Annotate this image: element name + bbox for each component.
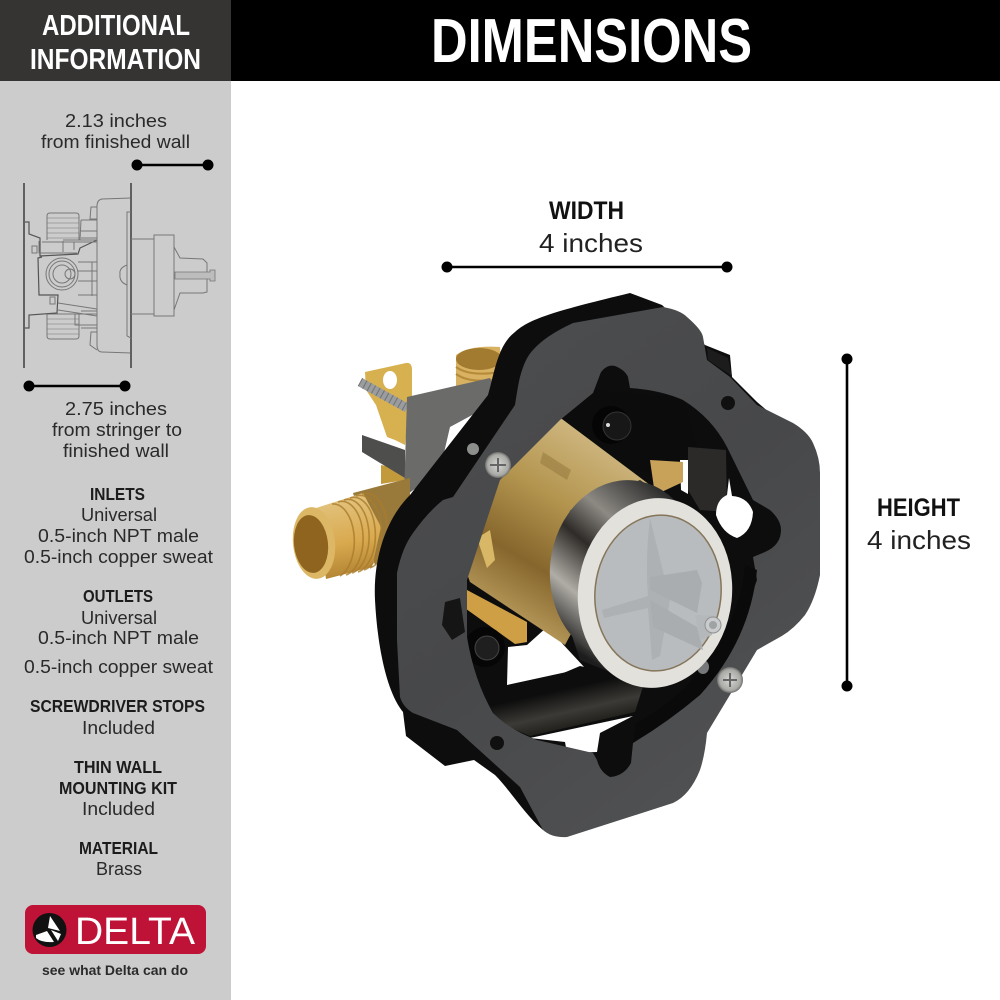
- brass mounting strap: [365, 363, 412, 484]
- text block: material: MATERIAL: [79, 838, 158, 858]
- brass valve body: [462, 416, 650, 645]
- upper stop plug: [592, 406, 631, 444]
- text block: inlets: 0.5-inch copper sweat: [24, 546, 213, 567]
- wordmark: DELTA: [75, 911, 196, 953]
- phillips screw upper: [467, 443, 511, 478]
- lower brass outlet: [462, 590, 527, 644]
- left brass inlet: [289, 478, 410, 581]
- text block: inlets: Universal: [81, 504, 157, 525]
- chrome valve collar: [541, 473, 742, 696]
- height label: HEIGHT: [877, 494, 960, 522]
- plaster guard cap details: [602, 518, 721, 660]
- text block: thin wall mounting kit: THIN WALL: [74, 757, 162, 777]
- heading line 1: ADDITIONAL: [42, 10, 190, 42]
- icon: Delta emblem: [32, 913, 66, 947]
- text: stringer measurement: finished wall: [63, 440, 169, 461]
- text: stringer measurement: [52, 398, 182, 461]
- stamped logo on body: [540, 452, 571, 480]
- black bracket seen through opening: [560, 390, 700, 480]
- ribbed wall: [688, 447, 727, 512]
- text block: material: [79, 838, 158, 879]
- tagline: see what Delta can do: [42, 963, 188, 978]
- right upper bracket: [707, 348, 732, 376]
- grey support box: [404, 378, 500, 497]
- height label: [867, 494, 971, 555]
- text block: screwdriver stops: Included: [82, 717, 155, 738]
- text block: outlets: 0.5-inch NPT male: [38, 627, 199, 648]
- text block: outlets: 0.5-inch copper sweat: [24, 656, 213, 677]
- width label: [539, 197, 643, 258]
- text block: outlets: OUTLETS: [83, 586, 153, 606]
- text: stringer measurement: from stringer to: [52, 419, 182, 440]
- text: wall depth measurement: from finished wall: [41, 131, 190, 152]
- lower white sliver: [530, 716, 633, 753]
- text block: inlets: 0.5-inch NPT male: [38, 525, 199, 546]
- dimension arrow: stringer to wall: [24, 381, 130, 391]
- height label: 4 inches: [867, 525, 971, 555]
- side bracket on body: [477, 530, 495, 568]
- sidebar panel background: [0, 0, 231, 1000]
- white gap below body: [507, 627, 585, 685]
- text block: screwdriver stops: [30, 696, 205, 738]
- text block: thin wall mounting kit: MOUNTING KIT: [59, 778, 177, 798]
- tray bracket: [362, 435, 405, 478]
- text block: thin wall mounting kit: Included: [82, 798, 155, 819]
- text block: inlets: INLETS: [90, 484, 145, 504]
- text: wall depth measurement: [41, 110, 190, 152]
- dimension arrow: width: [442, 262, 732, 272]
- text block: screwdriver stops: SCREWDRIVER STOPS: [30, 696, 205, 716]
- width label: WIDTH: [549, 197, 624, 225]
- white gap at right: [680, 460, 753, 538]
- heading line 2: INFORMATION: [30, 44, 201, 76]
- header panel: additional information: [0, 0, 231, 81]
- text block: material: Brass: [96, 858, 142, 879]
- upper brass outlet: [456, 347, 505, 400]
- dimension arrow: height: [842, 354, 852, 691]
- text: stringer measurement: 2.75 inches: [65, 398, 167, 419]
- text block: outlets: [24, 586, 213, 677]
- lower stop tab: [442, 598, 465, 640]
- dimension arrow: from finished wall: [132, 160, 213, 170]
- product photo: valve rough-in: [289, 293, 820, 837]
- text block: thin wall mounting kit: [59, 757, 177, 819]
- lower stop plug: [465, 627, 505, 667]
- header bar: dimensions: [231, 0, 1000, 81]
- brass hub top: [650, 460, 683, 495]
- width label: 4 inches: [539, 228, 643, 258]
- heading: dimensions: DIMENSIONS: [431, 7, 752, 76]
- front plate: [397, 307, 820, 837]
- diagram: valve side profile: [24, 183, 215, 368]
- back plate: [375, 293, 790, 830]
- black lip at lower right of opening: [633, 565, 757, 743]
- text block: outlets: Universal: [81, 607, 157, 628]
- corner mounting holes: [490, 396, 735, 750]
- white gap top-left: [549, 420, 564, 433]
- interior of the plate opening: [462, 390, 753, 753]
- mounting screw: [360, 382, 407, 408]
- text: wall depth measurement: 2.13 inches: [65, 110, 167, 131]
- phillips screw lower: [697, 660, 743, 693]
- lower rail: [490, 666, 645, 736]
- text block: inlets: [24, 484, 213, 567]
- logo: Delta: [25, 905, 206, 978]
